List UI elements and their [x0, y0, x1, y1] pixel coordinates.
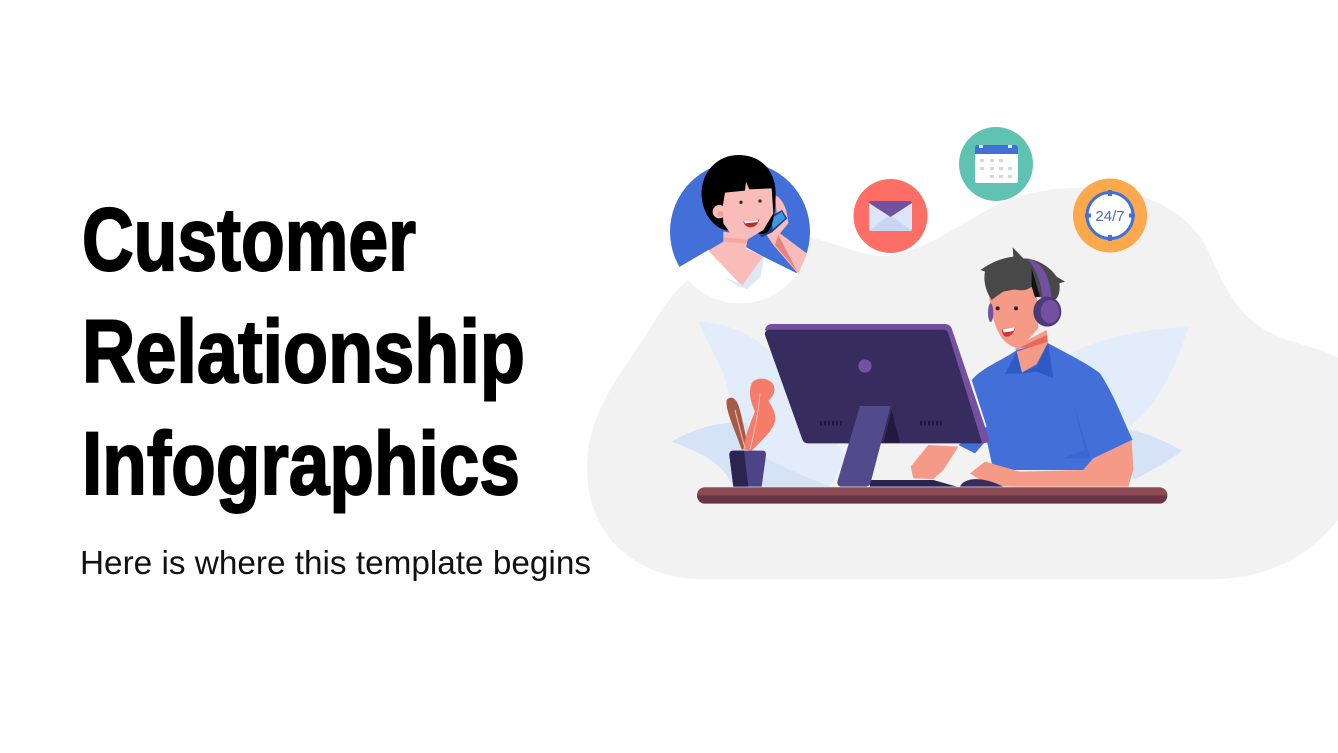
illustration: man at computer	[672, 247, 1188, 504]
desk	[697, 487, 1167, 504]
monitor stand	[837, 406, 900, 487]
monitor	[765, 324, 989, 443]
icon: email	[854, 179, 928, 253]
man: headset	[1028, 258, 1061, 327]
icon: 24/7 clock: 24/7	[1095, 208, 1125, 225]
keyboard	[870, 480, 957, 487]
background blob	[587, 188, 1338, 579]
title: Relationship	[82, 301, 525, 401]
man: left arm	[911, 445, 958, 479]
mouse	[960, 479, 1003, 487]
icon: calendar	[959, 127, 1033, 201]
plant	[726, 379, 775, 487]
man: right arm	[970, 440, 1133, 487]
background leaves	[672, 322, 1188, 487]
title	[82, 189, 525, 513]
man: face and neck	[988, 283, 1048, 373]
title: Infographics	[82, 413, 520, 513]
icon: woman on phone	[670, 155, 810, 320]
subtitle: Here is where this template begins	[80, 544, 591, 581]
man: hair	[981, 247, 1065, 300]
icon: 24/7 clock	[1073, 178, 1147, 252]
slide	[82, 127, 1338, 581]
man: shirt	[958, 343, 1133, 470]
title: Customer	[82, 189, 416, 289]
